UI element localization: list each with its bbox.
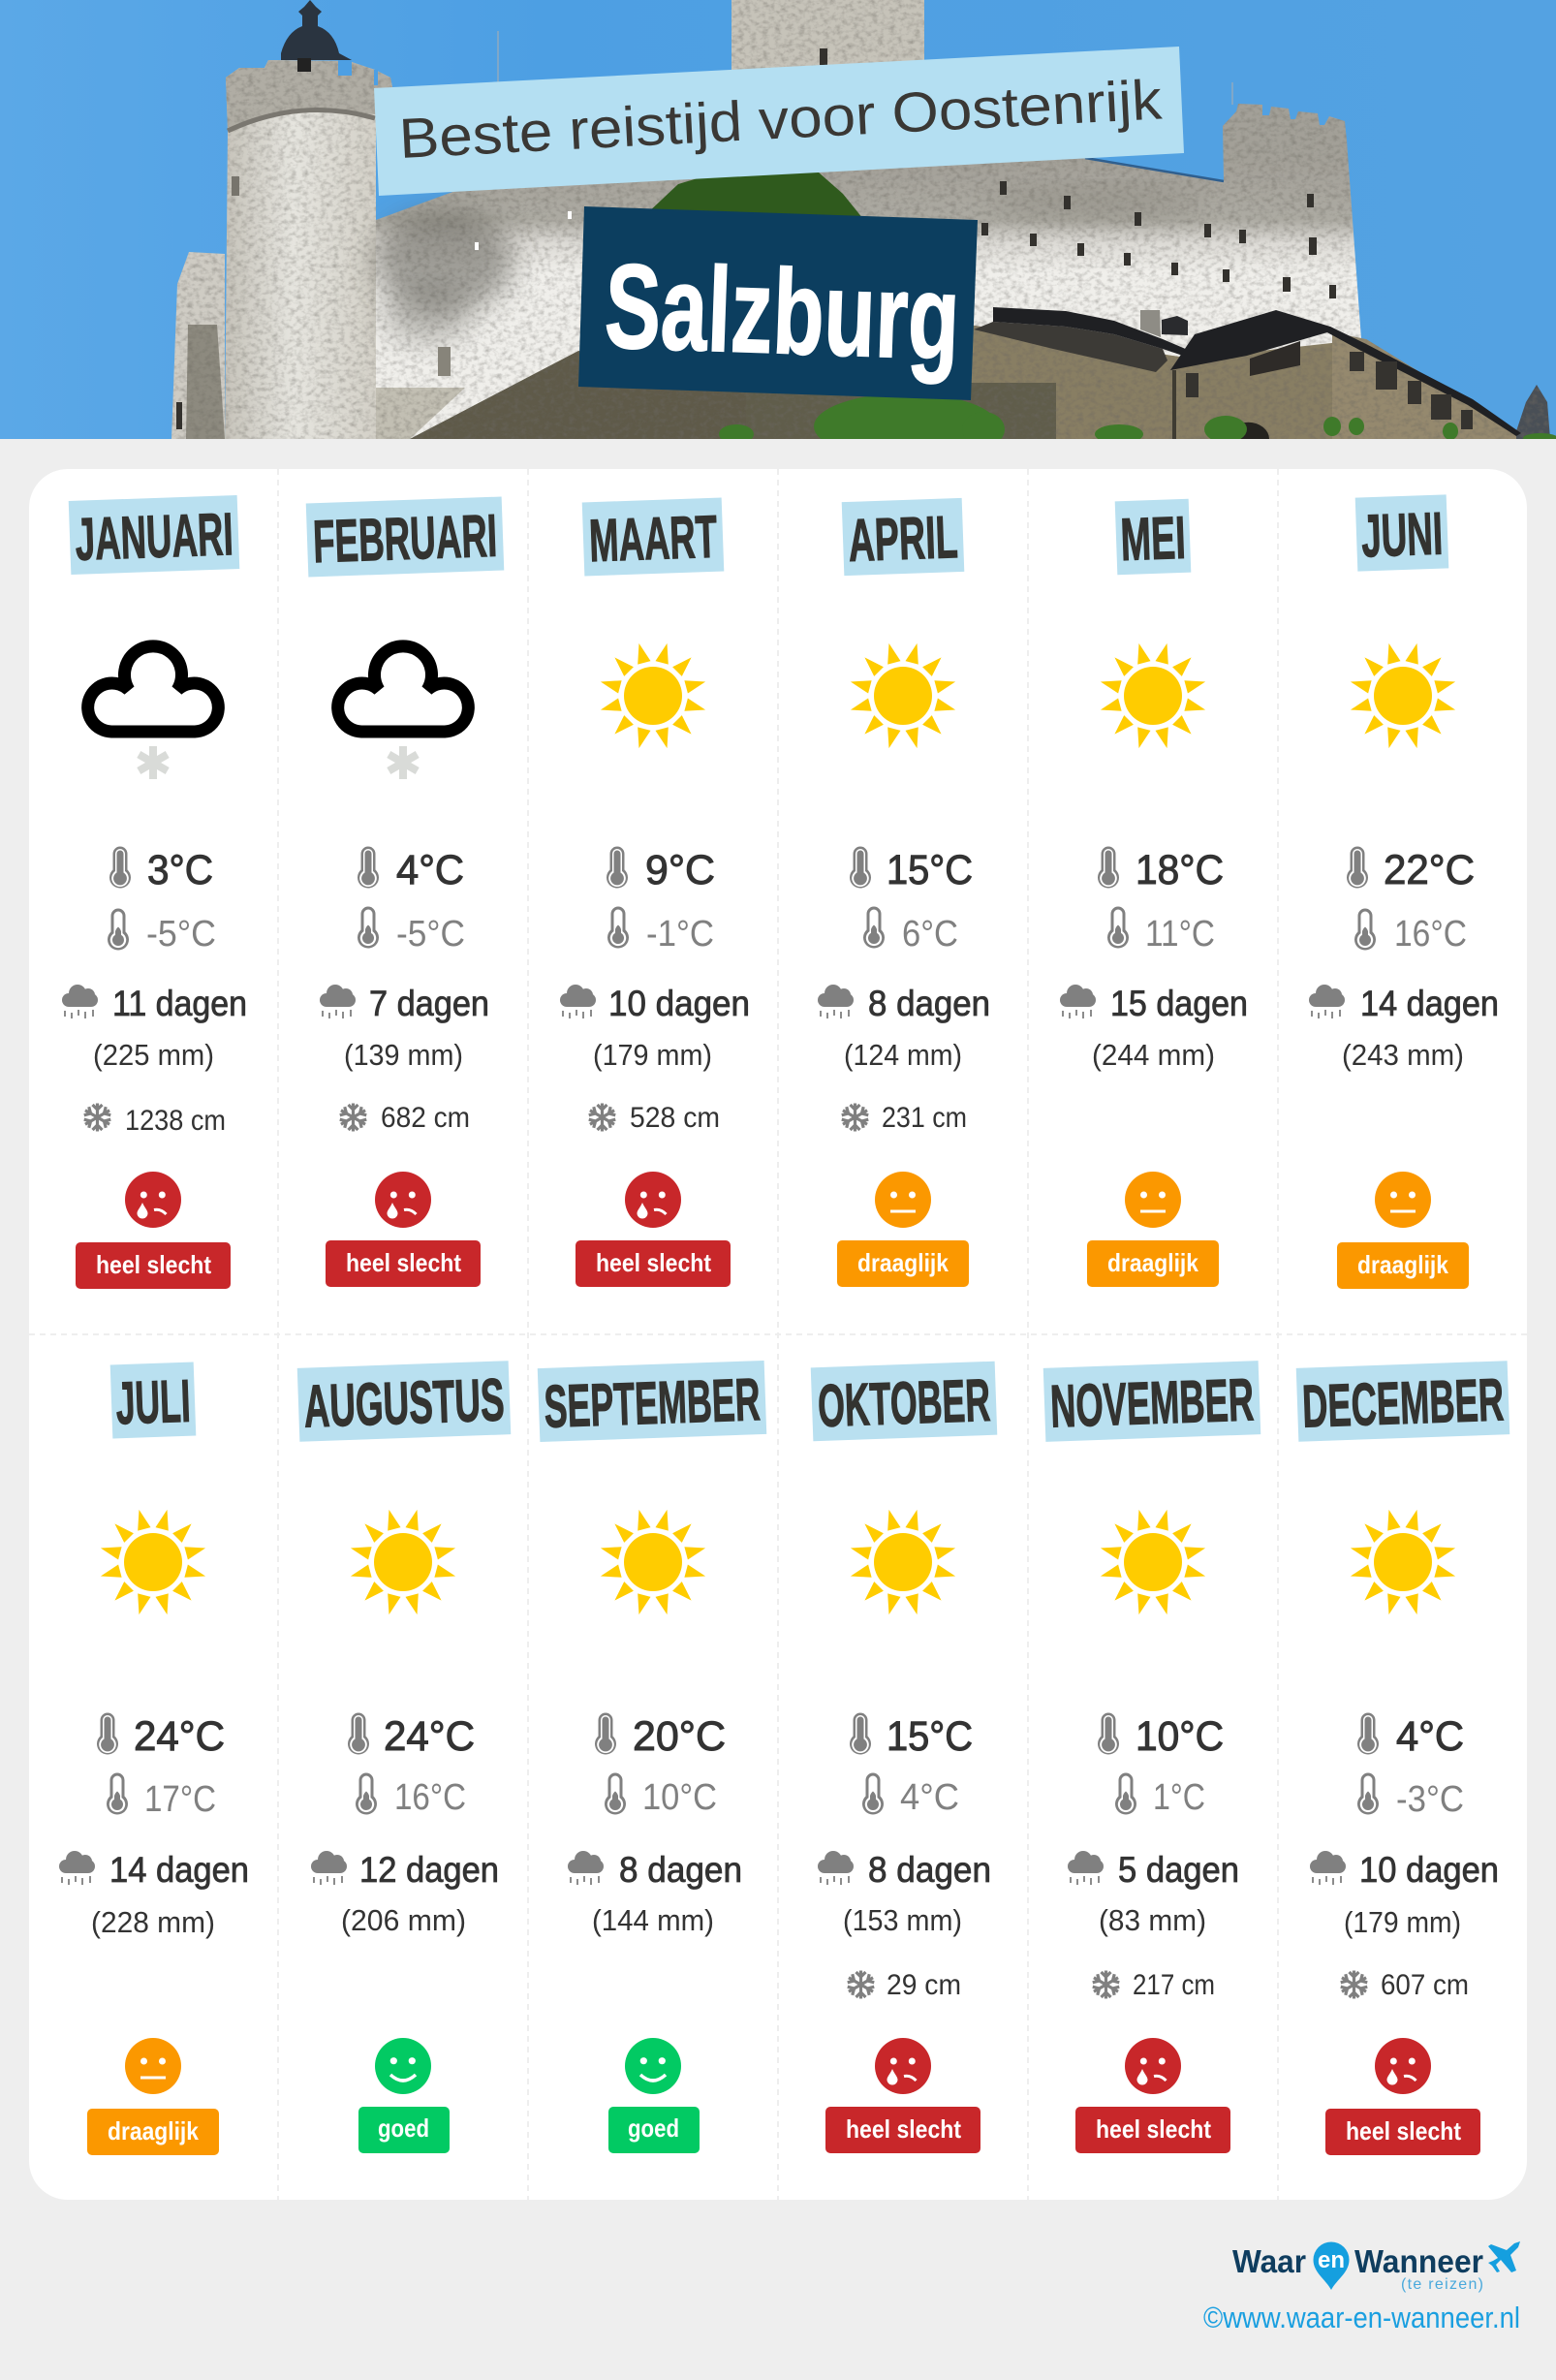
rain days: 7 dagen: [369, 984, 489, 1023]
precipitation: (144 mm): [592, 1903, 714, 1937]
city name box: Salzburg: [578, 206, 978, 400]
max temperature: 15°C: [887, 847, 973, 893]
rating: heel slecht: [1325, 2038, 1480, 2155]
rating: draaglijk: [87, 2038, 219, 2155]
icon: sun: [1101, 643, 1205, 748]
rain days: [568, 1850, 742, 1890]
min temperature: [358, 907, 465, 955]
rain days: [818, 984, 990, 1023]
max temperature: [1098, 847, 1224, 893]
icon: airplane: [1488, 2241, 1520, 2272]
rain days: 5 dagen: [1118, 1850, 1239, 1890]
min temperature: [107, 1773, 216, 1820]
min temperature: [1354, 909, 1467, 955]
precipitation: (83 mm): [1099, 1903, 1206, 1937]
city name box: Salzburg: Salzburg: [603, 239, 962, 386]
min temperature: 10°C: [642, 1777, 717, 1818]
dome roof: [281, 0, 352, 60]
heading: februari: [306, 496, 504, 578]
rain days: [1068, 1850, 1239, 1890]
heading: januari: JANUARI: [74, 501, 234, 574]
rating: heel slecht: heel slecht: [346, 1248, 461, 1277]
icon: sun: [351, 1510, 455, 1614]
snowfall: 217 cm: [1133, 1969, 1215, 2001]
min temperature: [863, 907, 958, 955]
rating: goed: goed: [628, 2114, 679, 2143]
heading: augustus: AUGUSTUS: [302, 1366, 506, 1441]
max temperature: [358, 847, 464, 893]
max temperature: 18°C: [1136, 847, 1224, 893]
tower crenellation gaps: [338, 58, 378, 85]
min temperature: [607, 907, 714, 955]
max temperature: 24°C: [134, 1713, 225, 1760]
precipitation: (243 mm): [1342, 1038, 1464, 1072]
precipitation: (228 mm): [91, 1905, 215, 1939]
icon: sun: [851, 1510, 955, 1614]
rating: heel slecht: [1075, 2038, 1230, 2153]
precipitation: (124 mm): [844, 1038, 962, 1072]
max temperature: [97, 1713, 225, 1760]
snowfall: [1339, 1969, 1469, 2001]
precipitation: (139 mm): [344, 1038, 463, 1072]
min temperature: -1°C: [646, 914, 714, 955]
rating: heel slecht: heel slecht: [1096, 2114, 1211, 2144]
min temperature: [108, 909, 216, 955]
month: januari: [62, 495, 247, 1289]
heading: oktober: OKTOBER: [817, 1367, 991, 1440]
title banner: Beste reistijd voor Oostenrijk: [397, 68, 1165, 171]
min temperature: 1°C: [1153, 1777, 1205, 1818]
min temperature: 6°C: [902, 914, 958, 955]
rating: heel slecht: heel slecht: [1346, 2116, 1461, 2145]
icon: sun: [101, 1510, 205, 1614]
rain days: 10 dagen: [608, 984, 750, 1023]
rating: heel slecht: [825, 2038, 980, 2153]
rain days: 8 dagen: [868, 984, 990, 1023]
heading: maart: MAART: [588, 504, 718, 575]
rating: draaglijk: draaglijk: [108, 2116, 199, 2145]
precipitation: (179 mm): [593, 1038, 712, 1072]
icon: location pin: [1314, 2242, 1349, 2290]
icon: sun: [601, 1510, 705, 1614]
rain days: 8 dagen: [868, 1850, 991, 1890]
panel: white card with month grid: [29, 469, 1527, 2200]
precipitation: (179 mm): [1344, 1905, 1461, 1939]
min temperature: [1107, 907, 1215, 955]
heading: maart: [582, 498, 724, 576]
max temperature: 4°C: [1396, 1713, 1464, 1760]
max temperature: [1357, 1713, 1464, 1760]
snowfall: 682 cm: [381, 1102, 470, 1134]
website credit: ©www.waar-en-wanneer.nl: [1203, 2301, 1520, 2334]
snowfall: 29 cm: [887, 1969, 961, 2001]
month: november: [1043, 1361, 1260, 2153]
month: december: [1296, 1361, 1509, 2155]
rain days: [1060, 984, 1248, 1023]
heading: juli: JULI: [114, 1368, 192, 1437]
month: februari: [306, 496, 504, 1287]
heading: juni: [1355, 494, 1448, 572]
header photo: Hohensalzburg fortress: [0, 0, 1556, 459]
snowfall: 607 cm: [1381, 1969, 1469, 2001]
month: maart: [560, 498, 750, 1287]
precipitation: (206 mm): [341, 1903, 466, 1937]
rating: heel slecht: [326, 1172, 481, 1287]
heading: september: SEPTEMBER: [543, 1366, 762, 1441]
min temperature: [605, 1773, 717, 1818]
min temperature: 16°C: [394, 1777, 466, 1818]
min temperature: 16°C: [1394, 914, 1467, 955]
icon: sun: [1351, 1510, 1455, 1614]
heading: mei: [1115, 499, 1191, 575]
heading: april: [842, 498, 964, 576]
max temperature: 24°C: [384, 1713, 475, 1760]
max temperature: [348, 1713, 475, 1760]
precipitation: (225 mm): [93, 1038, 214, 1072]
logo: Waar en Wanneer: Waar: [1232, 2243, 1306, 2279]
heading: september: [538, 1361, 766, 1442]
icon: sun: [601, 643, 705, 748]
month: september: [538, 1361, 766, 2153]
rain days: 10 dagen: [1359, 1850, 1499, 1890]
month: april: [818, 498, 990, 1287]
rating: heel slecht: heel slecht: [596, 1248, 711, 1277]
icon: sun: [1351, 643, 1455, 748]
rain days: [62, 984, 247, 1023]
rating: draaglijk: draaglijk: [1357, 1250, 1448, 1279]
rating: draaglijk: draaglijk: [857, 1248, 949, 1277]
rain days: [59, 1850, 249, 1890]
heading: november: [1043, 1361, 1260, 1442]
rain days: 8 dagen: [619, 1850, 742, 1890]
rain days: 15 dagen: [1110, 984, 1248, 1023]
title banner: [374, 47, 1184, 196]
heading: augustus: [297, 1361, 511, 1442]
rating: goed: goed: [378, 2114, 429, 2143]
rating: goed: [608, 2038, 700, 2153]
max temperature: [850, 847, 973, 893]
max temperature: [607, 847, 715, 893]
heading: juni: JUNI: [1360, 501, 1444, 570]
max temperature: [1347, 847, 1475, 893]
icon: sun: [1101, 1510, 1205, 1614]
snowfall: [587, 1102, 720, 1134]
snowfall: 528 cm: [630, 1102, 720, 1134]
month: oktober: [811, 1362, 997, 2153]
logo: Waar en Wanneer: Wanneer: [1354, 2243, 1483, 2279]
snowfall: 231 cm: [882, 1102, 967, 1134]
precipitation: (244 mm): [1092, 1038, 1215, 1072]
rain days: 12 dagen: [359, 1850, 499, 1890]
logo: Waar en Wanneer: [1232, 2241, 1520, 2293]
logo: Waar en Wanneer: (te reizen): [1401, 2276, 1483, 2293]
heading: november: NOVEMBER: [1049, 1366, 1255, 1441]
month: juli: [59, 1362, 249, 2155]
max temperature: 22°C: [1384, 847, 1475, 893]
heading: mei: MEI: [1119, 505, 1187, 574]
rating: heel slecht: heel slecht: [846, 2114, 961, 2144]
min temperature: 11°C: [1145, 914, 1215, 955]
rain days: [818, 1850, 991, 1890]
heading: januari: [69, 495, 239, 575]
max temperature: 10°C: [1136, 1713, 1224, 1760]
rating: draaglijk: [1337, 1172, 1469, 1289]
rain days: 14 dagen: [1360, 984, 1499, 1023]
min temperature: [1115, 1773, 1205, 1818]
max temperature: [1098, 1713, 1224, 1760]
max temperature: 4°C: [396, 847, 464, 893]
snowfall: 1238 cm: [125, 1105, 226, 1137]
rating: draaglijk: [1087, 1172, 1219, 1287]
logo: Waar en Wanneer: en: [1318, 2247, 1345, 2273]
min temperature: 4°C: [900, 1777, 959, 1818]
min temperature: [1357, 1773, 1464, 1820]
tree above Salzburg box: [652, 172, 860, 216]
month: juni: [1309, 494, 1499, 1289]
rating: heel slecht: [576, 1172, 731, 1287]
rating: draaglijk: draaglijk: [1107, 1248, 1198, 1277]
rain days: [1309, 984, 1499, 1023]
min temperature: -5°C: [146, 914, 216, 955]
min temperature: 17°C: [144, 1779, 216, 1820]
rain days: 11 dagen: [112, 984, 247, 1023]
icon: snow cloud: [338, 646, 468, 779]
min temperature: [356, 1773, 466, 1818]
min temperature: [862, 1773, 959, 1818]
max temperature: [109, 847, 213, 893]
rain days: [320, 984, 489, 1023]
min temperature: -3°C: [1396, 1779, 1464, 1820]
heading: oktober: [811, 1362, 997, 1441]
rating: heel slecht: [76, 1172, 231, 1289]
max temperature: 3°C: [147, 847, 213, 893]
snowfall: [82, 1103, 226, 1137]
rating: goed: [358, 2038, 450, 2153]
snowfall: [846, 1969, 961, 2001]
max temperature: 9°C: [645, 847, 715, 893]
snowfall: [1091, 1969, 1215, 2001]
heading: juli: [110, 1362, 196, 1438]
icon: snow cloud: [88, 646, 218, 779]
rating: heel slecht: heel slecht: [96, 1250, 211, 1279]
month: augustus: [297, 1361, 511, 2153]
icon: sun: [851, 643, 955, 748]
snowfall: [840, 1102, 967, 1134]
heading: februari: FEBRUARI: [312, 503, 498, 576]
precipitation: (153 mm): [843, 1903, 962, 1937]
rating: draaglijk: [837, 1172, 969, 1287]
rain days: 14 dagen: [109, 1850, 249, 1890]
max temperature: 20°C: [633, 1713, 726, 1760]
month: mei: [1060, 499, 1248, 1287]
max temperature: [850, 1713, 973, 1760]
snowfall: [338, 1102, 470, 1134]
max temperature: 15°C: [887, 1713, 973, 1760]
min temperature: -5°C: [396, 914, 465, 955]
heading: april: APRIL: [847, 504, 959, 575]
